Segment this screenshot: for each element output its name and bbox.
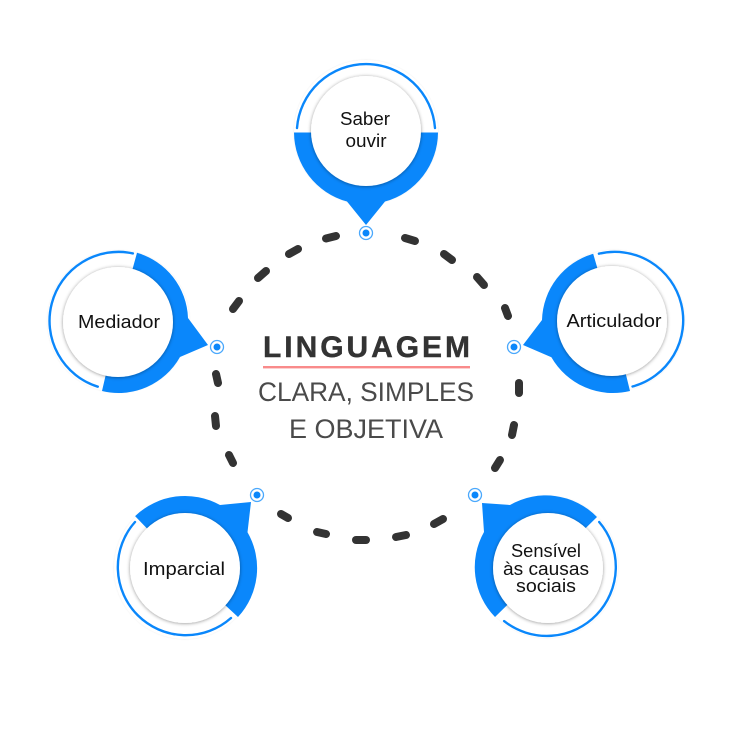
- badge: Saber ouvir: Saber: [340, 109, 390, 129]
- badge: Articulador: [508, 250, 684, 393]
- central title: [258, 331, 474, 444]
- badge: Articulador: Articulador: [566, 311, 662, 331]
- heading: linguagem: LINGUAGEM: [263, 331, 470, 364]
- badge: Saber ouvir: ouvir: [346, 131, 387, 151]
- badge: Sensível às causas sociais: Sensível: [511, 541, 581, 561]
- badge: Sensível às causas sociais: [468, 488, 618, 638]
- badge: Saber ouvir: [294, 60, 438, 240]
- badge: Mediador: Mediador: [78, 312, 160, 332]
- badge: Sensível às causas sociais: às causas: [503, 559, 589, 579]
- subtitle line two: E OBJETIVA: [289, 414, 443, 444]
- badge: Mediador: [48, 250, 224, 393]
- underline: [263, 366, 470, 368]
- dashed ring: [215, 236, 519, 540]
- subtitle line one: CLARA, SIMPLES: [258, 377, 474, 407]
- badge: Imparcial: Imparcial: [143, 559, 225, 579]
- badge: Sensível às causas sociais: sociais: [516, 576, 576, 596]
- badge: Imparcial: [114, 488, 264, 639]
